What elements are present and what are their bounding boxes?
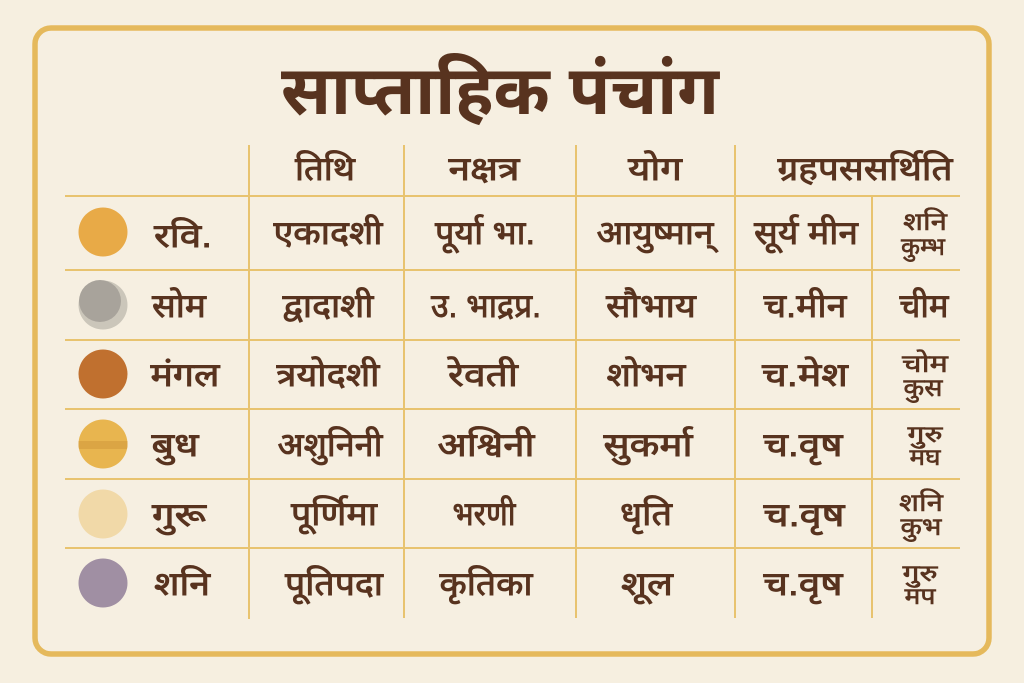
row: Tuesday: कुस [904, 374, 944, 403]
row: Sunday: सूर्य मीन [754, 214, 859, 253]
row: Thursday: कुभ [900, 513, 942, 542]
table header row: ग्रहपससर्थिति [778, 150, 954, 187]
row: Thursday: च.वृष [764, 496, 846, 535]
icon: mercury dot [78, 420, 128, 468]
row: Sunday: पूर्या भा. [435, 214, 535, 253]
row: Tuesday: त्रयोदशी [276, 356, 381, 393]
row: Tuesday: रेवती [447, 355, 520, 393]
icon: mars dot [78, 350, 128, 398]
row: Wednesday: च.वृष [764, 426, 844, 465]
row: Monday: सोम [152, 287, 207, 324]
table header row [295, 150, 954, 187]
row: Saturday: मंप [904, 583, 937, 609]
row: Wednesday: मंघ [910, 444, 941, 470]
row: Saturday [78, 558, 938, 609]
row: Sunday: आयुष्मान् [596, 214, 719, 253]
row: Tuesday: च.मेश [762, 355, 849, 393]
row: Tuesday: शोभन [606, 356, 686, 393]
row: Wednesday: अशुनिनी [278, 426, 384, 465]
row: Sunday: कुम्भ [901, 233, 945, 262]
row: Tuesday: मंगल [150, 356, 220, 393]
row: Monday: उ. भाद्रप्र. [431, 287, 541, 324]
row: Thursday [78, 488, 944, 542]
row: Wednesday: गुरु [908, 421, 943, 449]
row: Monday: चीम [900, 287, 950, 324]
icon: sun dot [78, 208, 128, 256]
row: Sunday [78, 207, 948, 262]
row: Monday: च.मीन [764, 287, 847, 324]
icon: jupiter dot [78, 490, 128, 538]
row: Thursday: गुरू [152, 496, 208, 535]
row: Monday: सौभाय [606, 287, 697, 324]
row: Wednesday: सुकर्मा [604, 426, 694, 465]
row: Wednesday: अश्विनी [438, 426, 536, 463]
row: Thursday: धृति [620, 495, 673, 534]
table header row: योग [628, 150, 684, 187]
row: Tuesday [78, 349, 949, 403]
row: Wednesday: बुध [152, 426, 199, 465]
row: Saturday: शनि [154, 565, 211, 602]
row: Saturday: गुरु [902, 560, 938, 588]
row: Monday: द्वादाशी [282, 287, 375, 324]
icon: moon dot [78, 280, 128, 330]
icon: saturn dot [78, 558, 128, 608]
table header row: तिथि [295, 150, 356, 187]
row: Saturday: शूल [621, 565, 674, 604]
row: Saturday: च.वृष [764, 565, 844, 604]
row: Sunday: रवि. [154, 217, 212, 254]
title: साप्ताहिक पंचांग [281, 53, 720, 129]
row: Thursday: शनि [899, 488, 944, 517]
row: Sunday: एकादशी [274, 214, 384, 251]
row: Monday [78, 280, 950, 330]
row: Sunday: शनि [903, 207, 948, 236]
row: Thursday: पूर्णिमा [291, 495, 379, 534]
table header row: नक्षत्र [448, 150, 520, 187]
row: Saturday: पूतिपदा [285, 565, 385, 604]
row: Saturday: कृतिका [440, 565, 534, 604]
row: Thursday: भरणी [452, 495, 517, 532]
row: Tuesday: चोम [902, 349, 949, 378]
row: Wednesday [78, 420, 943, 470]
